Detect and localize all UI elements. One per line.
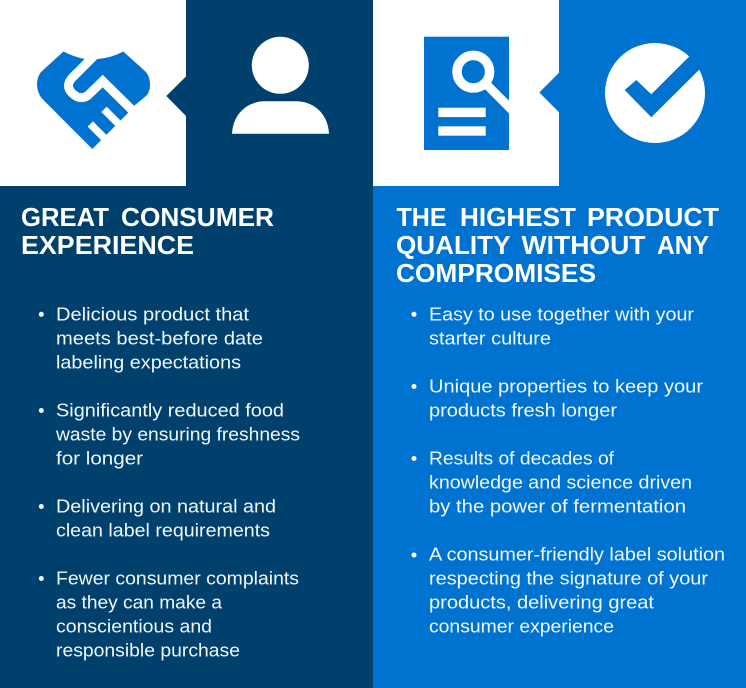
bullet: consumer-friendly label: A consumer-friendly label solution xyxy=(429,544,725,564)
bullet: consumer-friendly label xyxy=(412,544,725,636)
heading: great consumer experience: CONSUMER xyxy=(121,202,274,232)
icon: document with magnifier xyxy=(424,37,514,150)
bullet: fewer complaints: as they can make a xyxy=(56,592,223,612)
heading: highest product quality: PRODUCT xyxy=(587,202,719,232)
bullet: delicious product: Delicious product that xyxy=(56,304,249,324)
heading: highest product quality: WITHOUT xyxy=(522,230,646,260)
heading: highest product quality: COMPROMISES xyxy=(396,258,596,288)
bullet: consumer-friendly label: consumer experience xyxy=(429,616,614,636)
bullet: reduced food waste: for longer xyxy=(56,448,143,468)
bullet: easy to use xyxy=(412,304,694,348)
icon tile: handshake xyxy=(0,0,186,186)
bullet: decades of knowledge xyxy=(412,448,692,516)
bullet: unique properties xyxy=(412,376,703,420)
bullet: delicious product: labeling expectations xyxy=(56,352,241,372)
heading: great consumer experience: GREAT xyxy=(21,202,109,232)
heading: highest product quality xyxy=(396,202,719,288)
bullet: delicious product: meets best-before date xyxy=(56,328,263,348)
icon: check mark in circle xyxy=(605,43,710,143)
panel: highest product quality xyxy=(373,0,746,688)
bullet: delicious product xyxy=(39,304,263,372)
bullet: reduced food waste: waste by ensuring freshness xyxy=(55,424,300,444)
panel: great consumer experience xyxy=(0,0,373,688)
heading: highest product quality: QUALITY xyxy=(396,230,510,260)
bullet: reduced food waste: Significantly reduced food xyxy=(56,400,284,420)
icon tile: document search xyxy=(373,0,559,186)
heading: highest product quality: ANY xyxy=(657,230,709,260)
bullet: decades of knowledge: by the power of fermentation xyxy=(429,496,686,516)
bullet: natural and clean label: clean label requirements xyxy=(56,520,270,540)
bullet: fewer complaints: Fewer consumer complaints xyxy=(56,568,299,588)
heading: highest product quality: HIGHEST xyxy=(460,202,576,232)
bullet: decades of knowledge: Results of decades of xyxy=(429,448,615,468)
bullet: natural and clean label xyxy=(39,496,276,540)
bullet: consumer-friendly label: respecting the signature of your xyxy=(429,568,708,588)
bullet: fewer complaints: responsible purchase xyxy=(56,640,240,660)
bullet: easy to use: starter culture xyxy=(429,328,551,348)
bullet: decades of knowledge: knowledge and science driven xyxy=(429,472,692,492)
bullet: fewer complaints: conscientious and xyxy=(56,616,212,636)
bullet: unique properties: Unique properties to keep your xyxy=(429,376,703,396)
bullet: unique properties: products fresh longer xyxy=(429,400,617,420)
icon: handshake xyxy=(37,52,150,149)
heading: great consumer experience xyxy=(21,202,274,260)
bullet: fewer complaints xyxy=(39,568,299,660)
icon: person xyxy=(232,37,329,134)
bullet: reduced food waste xyxy=(39,400,300,468)
heading: highest product quality: THE xyxy=(396,202,446,232)
bullet: consumer-friendly label: products, delivering great xyxy=(429,592,654,612)
heading: great consumer experience: EXPERIENCE xyxy=(21,230,194,260)
bullet: natural and clean label: Delivering on natural and xyxy=(56,496,276,516)
bullet: easy to use: Easy to use together with your xyxy=(429,304,694,324)
